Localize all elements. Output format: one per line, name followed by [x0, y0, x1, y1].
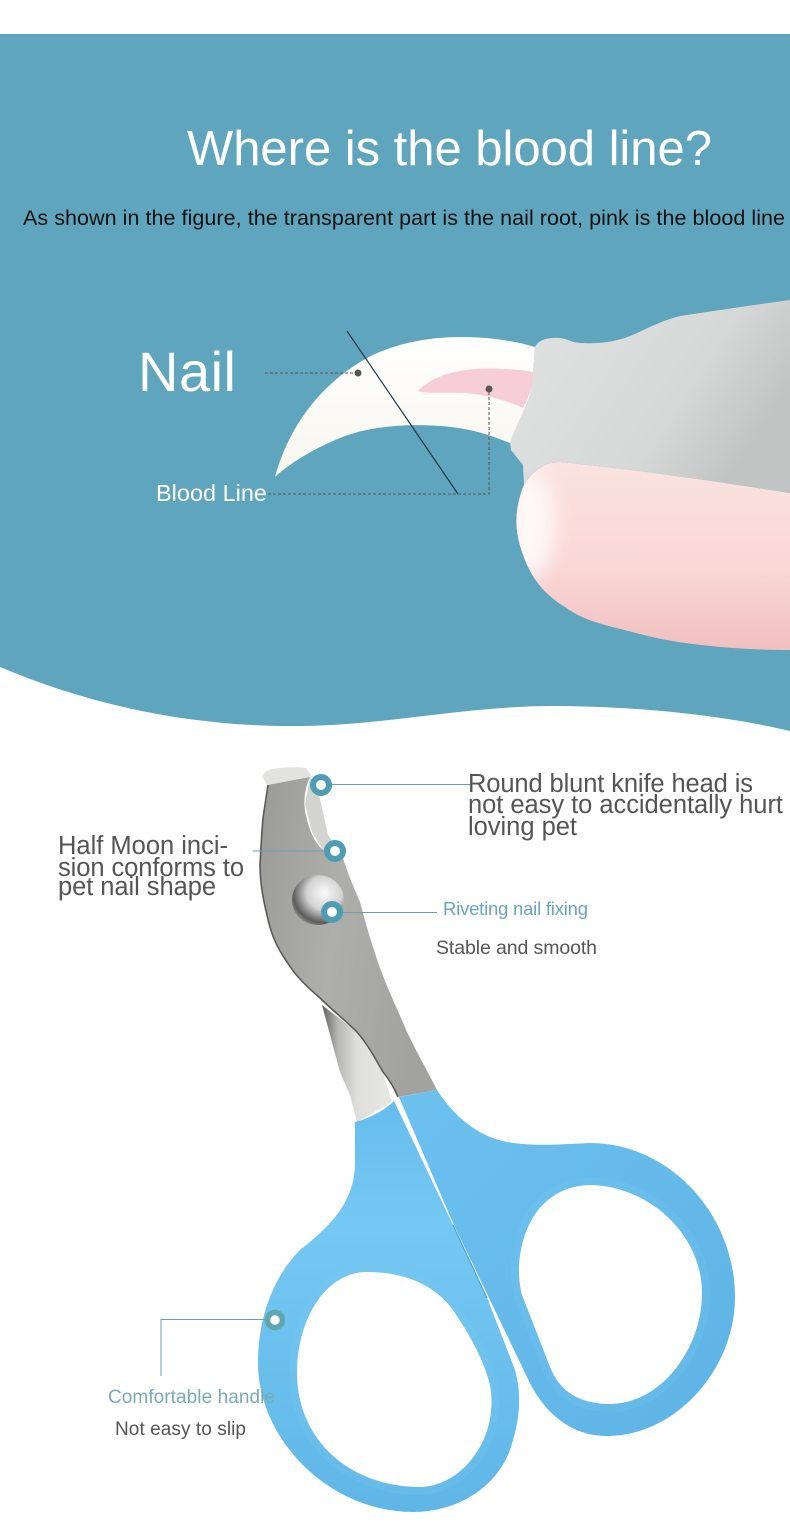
callout: riveting nail: Stable and smooth: [436, 937, 597, 959]
nail marker: [354, 370, 362, 376]
handle joint line: [453, 1225, 487, 1298]
title: Where is the blood line?: [187, 122, 712, 176]
upper blade: [260, 777, 437, 1097]
notch blade: [305, 777, 343, 858]
left handle ridge: [297, 1272, 492, 1487]
callout: knife head: not easy to accidentally hurt: [468, 791, 783, 819]
cut line: [347, 331, 458, 494]
callout: knife head: loving pet: [468, 813, 577, 841]
blood line marker: [486, 386, 492, 392]
callout: comfortable handle: Comfortable handle: [108, 1387, 275, 1408]
callout: half moon incision: pet nail shape: [58, 873, 216, 901]
callout: half moon incision: Half Moon inci-: [58, 832, 228, 860]
top tip highlight: [263, 767, 312, 786]
callout: knife head: [313, 770, 783, 841]
callout: knife head: Round blunt knife head is: [468, 770, 753, 798]
callout: half moon incision: sion conforms to: [58, 854, 244, 882]
rivet: [292, 875, 344, 925]
blood line leader: [268, 389, 489, 494]
upper blade dark edge: [260, 785, 398, 1097]
panel: teal blood line background with wavy bottom: [0, 34, 790, 731]
nail leader: [265, 372, 358, 374]
callout: comfortable handle: Not easy to slip: [115, 1419, 246, 1440]
grey paw fur: [510, 300, 790, 493]
left handle: [258, 1101, 519, 1512]
finger highlight: [506, 470, 554, 580]
callout: riveting nail: [324, 898, 597, 959]
callout: half moon incision: [58, 832, 343, 901]
callout: riveting nail: Riveting nail fixing: [443, 898, 588, 919]
blood line label: Blood Line: [156, 480, 267, 506]
scissors: [258, 767, 735, 1512]
claw: [275, 337, 535, 477]
right handle ridge: [519, 1185, 702, 1404]
finger pad: [516, 462, 790, 650]
subtitle text: As shown in the figure, the transparent part is the nail root, pink is the blood line: [23, 206, 785, 230]
lower blade: [322, 1005, 392, 1122]
callout: comfortable handle: [108, 1312, 282, 1440]
right handle: [399, 1090, 735, 1436]
blood line quick: [418, 369, 533, 408]
nail label: Nail: [138, 340, 236, 403]
nail diagram: [265, 300, 790, 650]
